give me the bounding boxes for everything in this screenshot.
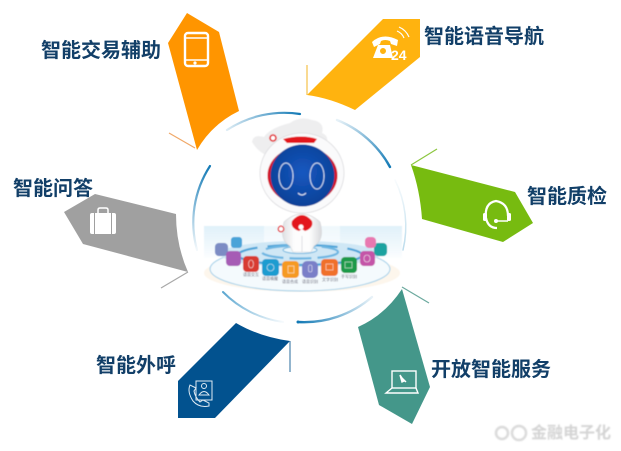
function icons row: 语音合成 bbox=[282, 278, 298, 284]
function icons row: 语音识别 bbox=[302, 278, 318, 284]
function icons row: 文字识别 bbox=[322, 276, 338, 282]
robot cap bbox=[252, 119, 327, 156]
watermark: 金融电子化 bbox=[531, 423, 611, 442]
watermark bbox=[496, 423, 611, 442]
icon: headset bbox=[483, 201, 511, 228]
robot and platform illustration bbox=[204, 119, 402, 292]
blue point bbox=[296, 320, 300, 324]
platform bbox=[204, 241, 400, 292]
heading: 开放智能服务: 开放智能服务 bbox=[431, 358, 551, 381]
icon: briefcase bbox=[90, 208, 116, 234]
panel: 智能问答 grey bbox=[64, 194, 188, 288]
pointer line bbox=[306, 65, 308, 95]
pointer line bbox=[289, 341, 291, 372]
robot face bbox=[270, 144, 334, 206]
robot head bbox=[260, 133, 344, 213]
pointer line bbox=[402, 287, 429, 303]
heading: 智能问答: 智能问答 bbox=[13, 177, 93, 200]
pointer line bbox=[161, 272, 188, 288]
icon: smartphone bbox=[185, 33, 208, 66]
pointer line bbox=[169, 133, 195, 148]
panel: 开放智能服务 teal bbox=[358, 287, 430, 424]
function icons row: 语音交互 bbox=[243, 271, 259, 277]
central ring of arcs bbox=[193, 113, 406, 322]
icon: 24h telephone: 24 bbox=[391, 47, 407, 63]
icon: video call bbox=[189, 381, 212, 406]
panel: 智能交易辅助 orange bbox=[168, 13, 239, 150]
heading: 智能外呼: 智能外呼 bbox=[96, 354, 176, 377]
panel: 智能质检 green bbox=[411, 149, 533, 242]
heading: 智能语音导航: 智能语音导航 bbox=[424, 24, 544, 48]
icon: laptop bbox=[386, 371, 418, 393]
function icons row: 手写识别 bbox=[341, 273, 357, 279]
function icons row bbox=[215, 237, 387, 284]
robot body bbox=[282, 214, 322, 252]
glass panels bbox=[204, 226, 402, 258]
function icons row: 语音唤醒 bbox=[262, 275, 278, 281]
pointer line bbox=[411, 149, 437, 165]
robot bbox=[252, 119, 344, 252]
panel: 智能外呼 navy bbox=[178, 323, 290, 418]
heading: 智能质检: 智能质检 bbox=[527, 184, 607, 208]
heading: 智能交易辅助: 智能交易辅助 bbox=[41, 38, 161, 62]
panel: 智能语音导航 yellow bbox=[307, 19, 420, 110]
